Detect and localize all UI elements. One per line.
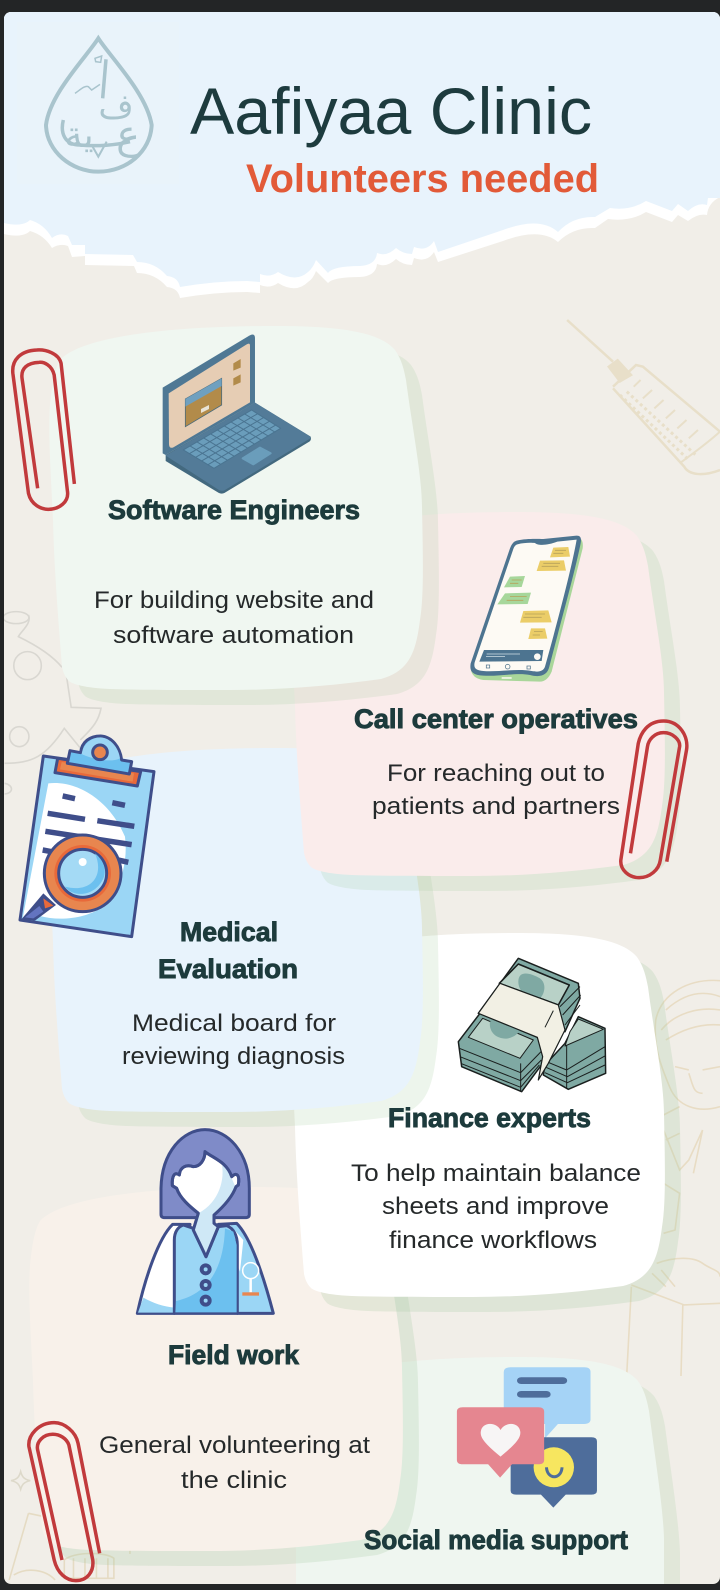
decoration: syringe sketch [567,320,720,474]
icon: paperclip top left [13,350,74,509]
text: medical evaluation description: reviewing diagnosis [122,1043,345,1070]
panel: finance experts [291,933,681,1312]
panel: call center operatives [291,512,681,891]
icon: clinic logo [44,34,154,174]
heading: field work: Field work [168,1340,300,1370]
icon: smartphone [470,536,583,682]
panel: medical evaluation [49,748,439,1127]
text: software engineers description: For building website and [94,587,374,614]
heading: call center operatives: Call center operatives [354,704,638,734]
icon: laptop [163,334,311,494]
title: Aafiyaa Clinic [190,74,592,148]
subtitle: Volunteers needed [246,157,599,201]
text: field work description: the clinic [181,1467,287,1494]
icon: paperclip bottom left [29,1423,100,1581]
text: call center description: For reaching out to [387,760,605,787]
text: finance description: To help maintain balance [351,1160,641,1187]
text: software engineers description [96,590,372,643]
text: medical evaluation description [122,1010,345,1070]
text: call center description [372,760,620,820]
text: finance description: sheets and improve [382,1193,609,1220]
text: medical evaluation description: Medical board for [132,1010,336,1037]
heading: medical evaluation [159,921,297,979]
heading: medical evaluation: Evaluation [158,954,298,984]
icon: clinic logo: ف [98,87,134,127]
icon: clinic logo: ع [116,112,140,158]
text: field work description [100,1436,370,1488]
text: field work description: General volunteering at [99,1432,370,1459]
decoration: flask sketch left [3,612,101,794]
text: finance description: finance workflows [389,1227,597,1254]
icon: clinic logo: ية [64,115,94,156]
heading: medical evaluation: Medical [180,917,278,947]
text: call center description: patients and partners [372,793,620,820]
heading: social media support: Social media support [364,1525,628,1555]
decoration: bottom-left flask and sparkle [9,1472,130,1580]
panel: software engineers [49,326,439,705]
heading: software engineers: Software Engineers [108,495,360,525]
heading: finance experts: Finance experts [388,1103,591,1133]
panel: field work [41,1297,419,1566]
panel: social media support [626,1372,680,1584]
icon: money stacks [458,958,606,1092]
text: software engineers description: software automation [113,622,354,649]
icon: social media chat bubbles [457,1367,597,1508]
icon: woman in lab coat [137,1130,273,1313]
decoration: man sketch right [627,980,720,1376]
text: finance description [352,1164,640,1248]
header band with torn paper edge [0,12,720,298]
icon: paperclip middle right [621,721,687,878]
icon: clipboard with magnifier [20,736,154,937]
